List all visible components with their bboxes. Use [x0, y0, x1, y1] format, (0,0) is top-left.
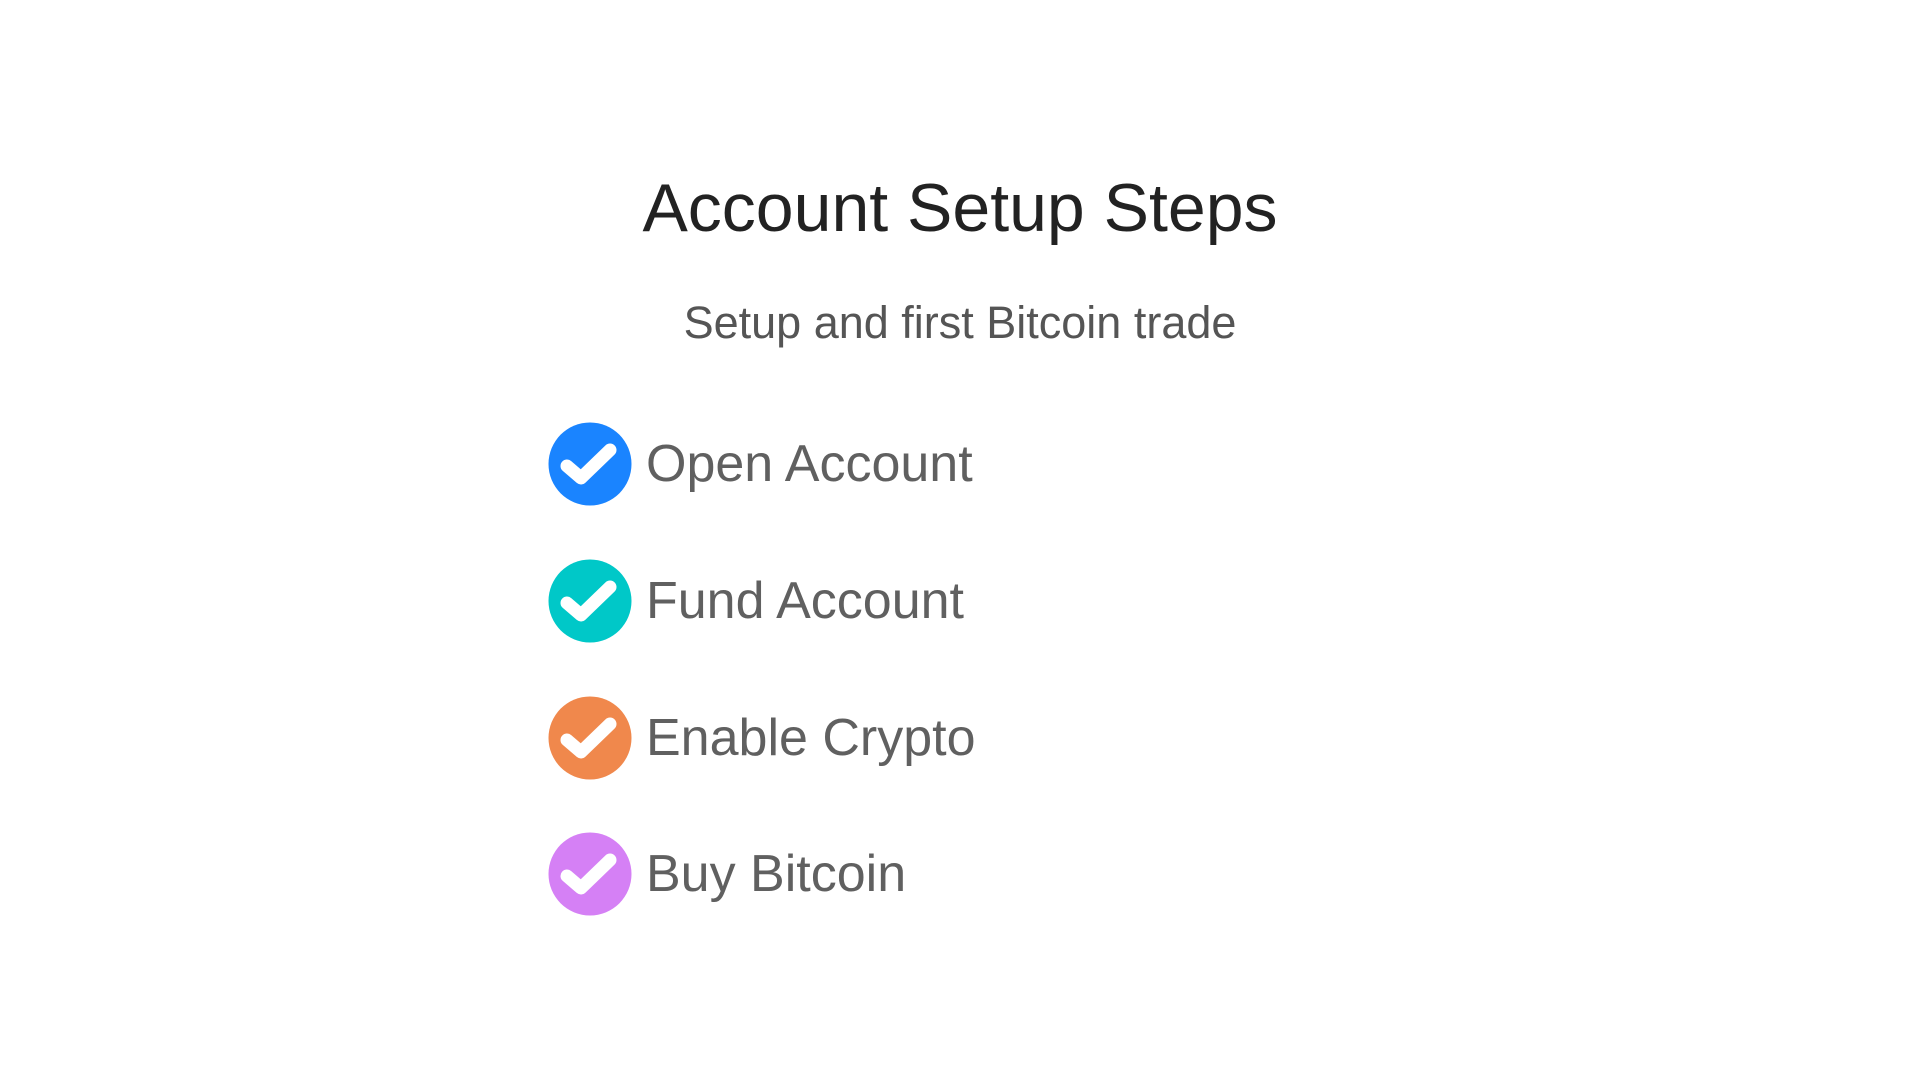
icon: orange check circle	[548, 696, 632, 780]
step 2: Fund Account	[548, 560, 964, 642]
icon: purple check circle	[548, 832, 632, 916]
subtitle: Setup and first Bitcoin trade	[684, 297, 1236, 348]
title: Account Setup Steps	[642, 170, 1278, 246]
label: Buy Bitcoin	[646, 845, 906, 903]
step 4: Buy Bitcoin	[548, 832, 906, 916]
label: Enable Crypto	[646, 709, 976, 767]
label: Open Account	[646, 435, 973, 493]
icon: teal check circle	[548, 560, 632, 642]
label: Fund Account	[646, 572, 964, 630]
step 3: Enable Crypto	[548, 696, 976, 780]
step 1: Open Account	[548, 422, 973, 506]
icon: blue check circle	[548, 422, 632, 506]
